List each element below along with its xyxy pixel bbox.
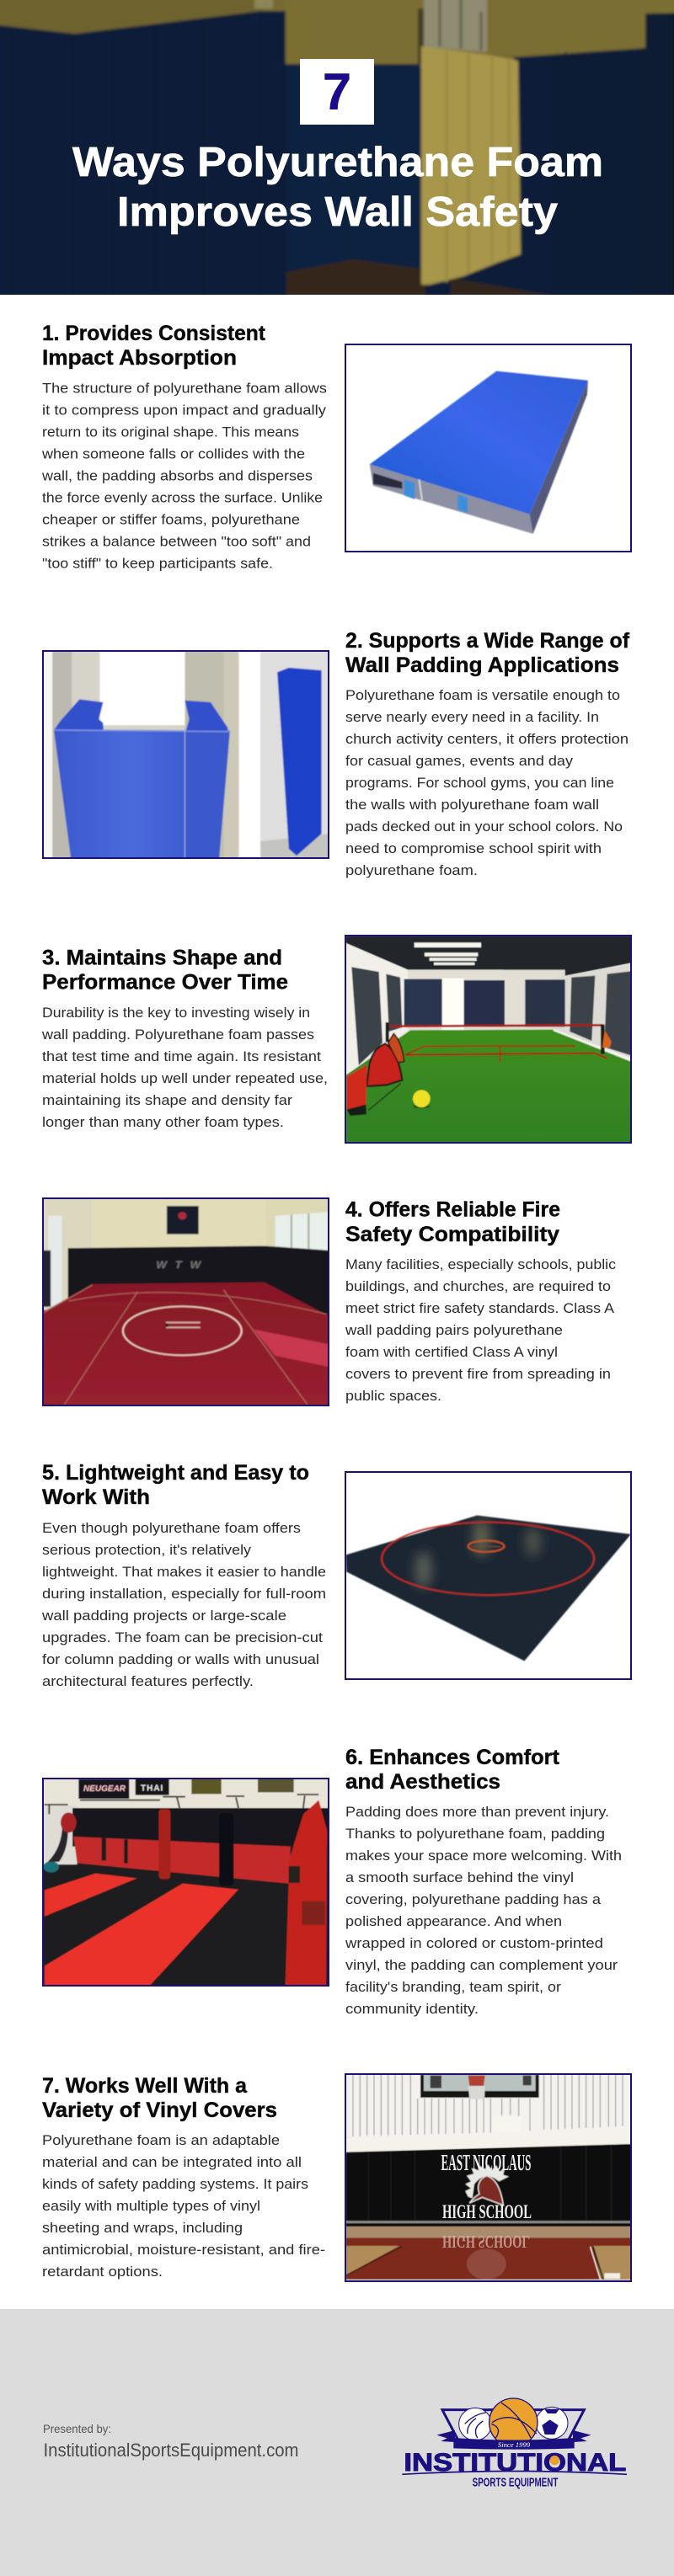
body text: sheeting and wraps, including	[42, 2221, 243, 2236]
image: martial arts gym	[42, 1778, 329, 1987]
heading: 5. Lightweight and Easy to	[42, 1461, 309, 1485]
body text: strikes a balance between "too soft" and	[42, 534, 311, 549]
body text: buildings, and churches, are required to	[345, 1279, 611, 1294]
gym wall lettering: HIGH SCHOOL	[442, 2232, 530, 2252]
body text: polished appearance. And when	[345, 1914, 562, 1929]
body text: Many facilities, especially schools, public	[345, 1257, 616, 1272]
body text: serve nearly every need in a facility. In	[345, 710, 599, 725]
body text: Padding does more than prevent injury.	[345, 1805, 609, 1820]
body text: during installation, especially for full-room	[42, 1587, 326, 1602]
body text: Durability is the key to investing wisely in	[42, 1005, 310, 1021]
body text: covering, polyurethane padding has a	[345, 1892, 602, 1907]
gym wall lettering: HIGH SCHOOL	[442, 2201, 532, 2222]
image: blue gym mat	[345, 344, 632, 552]
presented by label: Presented by:	[43, 2422, 111, 2435]
heading: 7. Works Well With a	[42, 2074, 248, 2098]
body text: material and can be integrated into all	[42, 2155, 302, 2170]
body text: retardant options.	[42, 2264, 163, 2280]
logo: Institutional Sports Equipment: SPORTS EQUIPMENT	[473, 2477, 558, 2490]
heading: 6. Enhances Comfort	[345, 1746, 560, 1769]
body text: wall padding pairs polyurethane	[345, 1323, 563, 1338]
body text: wall, the padding absorbs and disperses	[41, 468, 313, 483]
title: Improves Wall Safety	[117, 189, 558, 235]
logo: Institutional Sports Equipment	[402, 2398, 627, 2490]
body text: "too stiff" to keep participants safe.	[42, 556, 273, 571]
body text: polyurethane foam.	[345, 863, 478, 878]
body text: the walls with polyurethane foam wall	[345, 797, 599, 813]
heading: Work With	[42, 1485, 150, 1509]
body text	[41, 1521, 326, 1689]
heading: 3. Maintains Shape and	[42, 947, 282, 970]
body text: community identity.	[345, 2002, 479, 2017]
heading: Variety of Vinyl Covers	[42, 2099, 277, 2122]
body text: covers to prevent fire from spreading in	[345, 1367, 611, 1382]
heading	[345, 1746, 560, 1794]
body text: lightweight. That makes it easier to handle	[42, 1565, 326, 1580]
body text: facility's branding, team spirit, or	[345, 1980, 562, 1995]
heading	[42, 2074, 277, 2122]
heading: 2. Supports a Wide Range of	[345, 629, 630, 653]
logo: Institutional Sports Equipment: Since 1999	[498, 2440, 531, 2449]
body text: for column padding or walls with unusual	[42, 1652, 319, 1667]
heading	[345, 1197, 560, 1246]
heading	[345, 629, 630, 677]
body text: public spaces.	[345, 1389, 441, 1404]
body text: church activity centers, it offers protection	[345, 732, 629, 747]
number badge	[300, 59, 374, 125]
body text: Even though polyurethane foam offers	[42, 1521, 301, 1536]
panel: section 2	[42, 629, 630, 878]
body text: Polyurethane foam is versatile enough to	[345, 688, 620, 703]
body text: the force evenly across the surface. Unlike	[42, 490, 323, 505]
panel: section 4	[42, 1197, 616, 1406]
body text: foam with certified Class A vinyl	[345, 1345, 558, 1360]
image: school gym wall padding: EAST NICOLAUS	[441, 2150, 531, 2175]
body text	[345, 1257, 616, 1404]
image: red wrestling mat room	[42, 1197, 329, 1406]
panel: section 7	[42, 2073, 632, 2282]
body text: kinds of safety padding systems. It pairs	[42, 2177, 308, 2192]
image: indoor turf room	[345, 935, 632, 1144]
number badge: 7	[323, 63, 351, 120]
panel: section 1	[41, 322, 632, 571]
body text: longer than many other foam types.	[42, 1115, 284, 1130]
body text: material holds up well under repeated use,	[42, 1071, 328, 1086]
image: martial arts gym: THAI	[141, 1784, 163, 1794]
body text: wrapped in colored or custom-printed	[345, 1936, 603, 1951]
footer panel	[0, 2309, 674, 2576]
body text: architectural features perfectly.	[42, 1674, 254, 1689]
body text: programs. For school gyms, you can line	[345, 776, 614, 791]
body text: Thanks to polyurethane foam, padding	[345, 1827, 605, 1842]
body text	[41, 381, 327, 571]
image: red wrestling mat room: W T W	[156, 1260, 203, 1271]
heading	[42, 1461, 309, 1509]
gym wall lettering	[441, 2150, 532, 2252]
panel: section 5	[41, 1461, 632, 1689]
hero background photo: padded room with curtain	[0, 0, 674, 312]
body text: it to compress upon impact and gradually	[42, 403, 327, 418]
body text: for casual games, events and day	[345, 754, 574, 769]
heading: Safety Compatibility	[345, 1223, 559, 1246]
body text: maintaining its shape and density far	[42, 1093, 293, 1108]
body text: serious protection, it's relatively	[42, 1543, 252, 1558]
panel: section 6	[42, 1746, 622, 2017]
body text: vinyl, the padding can complement your	[345, 1958, 618, 1973]
logo: Institutional Sports Equipment: INSTITUTIONAL	[404, 2449, 626, 2477]
heading	[42, 947, 288, 994]
body text: a smooth surface behind the vinyl	[345, 1870, 574, 1885]
body text: when someone falls or collides with the	[41, 446, 305, 461]
heading	[42, 322, 266, 370]
heading: Impact Absorption	[42, 346, 237, 370]
body text: The structure of polyurethane foam allows	[42, 381, 327, 396]
image: column padding	[42, 650, 329, 861]
body text: wall padding projects or large-scale	[41, 1608, 286, 1624]
title	[72, 140, 603, 235]
image: school gym wall padding	[345, 2073, 632, 2282]
body text: meet strict fire safety standards. Class A	[345, 1301, 614, 1316]
body text: that test time and time again. Its resistant	[42, 1049, 321, 1064]
body text	[42, 2133, 325, 2280]
body text: makes your space more welcoming. With	[345, 1848, 622, 1864]
image: martial arts gym: NEUGEAR	[83, 1784, 126, 1794]
heading: 4. Offers Reliable Fire	[345, 1197, 560, 1221]
heading: Wall Padding Applications	[345, 653, 619, 677]
body text: need to compromise school spirit with	[345, 841, 602, 856]
heading: 1. Provides Consistent	[42, 322, 266, 345]
website url: InstitutionalSportsEquipment.com	[44, 2440, 298, 2461]
body text	[41, 1005, 328, 1130]
body text: cheaper or stiffer foams, polyurethane	[42, 512, 300, 527]
panel: section 3	[41, 935, 632, 1144]
image: black wrestling mat	[345, 1471, 632, 1680]
body text: upgrades. The foam can be precision-cut	[42, 1630, 323, 1645]
body text: return to its original shape. This means	[42, 424, 299, 440]
heading: Performance Over Time	[42, 970, 288, 994]
body text: easily with multiple types of vinyl	[42, 2199, 260, 2214]
body text: Polyurethane foam is an adaptable	[42, 2133, 280, 2148]
body text	[345, 1805, 622, 2017]
body text: wall padding. Polyurethane foam passes	[41, 1027, 314, 1043]
body text: antimicrobial, moisture-resistant, and fire-	[42, 2243, 325, 2258]
body text	[345, 688, 629, 878]
body text: pads decked out in your school colors. No	[345, 819, 623, 835]
heading: and Aesthetics	[345, 1770, 500, 1794]
title: Ways Polyurethane Foam	[72, 140, 603, 185]
hero banner	[0, 0, 674, 312]
